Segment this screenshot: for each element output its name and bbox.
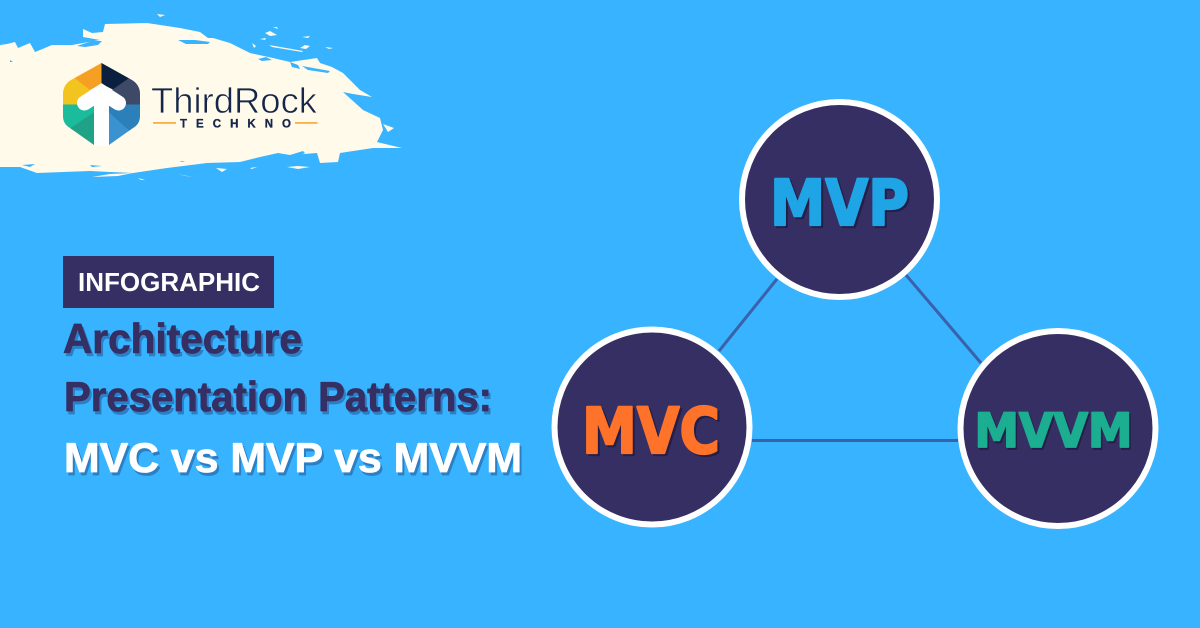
- badge: INFOGRAPHIC: [63, 256, 274, 308]
- title line 2: Presentation Patterns:: [66, 376, 494, 423]
- title line 1: Architecture: [63, 315, 302, 362]
- brush stroke background: [0, 14, 402, 180]
- node: MVVM: MVVM: [974, 404, 1132, 459]
- node: MVP: [742, 102, 937, 297]
- logo icon: hexagon with arrow: [63, 63, 140, 146]
- title: [63, 315, 524, 484]
- title line 3: MVC vs MVP vs MVVM: [66, 437, 524, 484]
- title line 3: MVC vs MVP vs MVVM: [64, 434, 522, 481]
- title line 2: Presentation Patterns:: [64, 373, 492, 420]
- node: MVP: MVP: [772, 169, 911, 242]
- badge: INFOGRAPHIC: INFOGRAPHIC: [78, 267, 260, 297]
- logo: ThirdRock Techkno: [58, 60, 318, 147]
- node: MVP: MVP: [770, 167, 909, 240]
- node: MVC: [554, 330, 750, 524]
- connecting lines triangle: [719, 275, 981, 440]
- title line 1: Architecture: [65, 318, 304, 365]
- node: MVVM: [960, 331, 1156, 526]
- node: MVC: MVC: [582, 395, 720, 468]
- logo tagline: TECHKNO: [180, 118, 291, 130]
- logo wordmark: ThirdRock: [151, 80, 318, 121]
- node: MVVM: MVVM: [976, 406, 1134, 461]
- node: MVC: MVC: [584, 397, 722, 470]
